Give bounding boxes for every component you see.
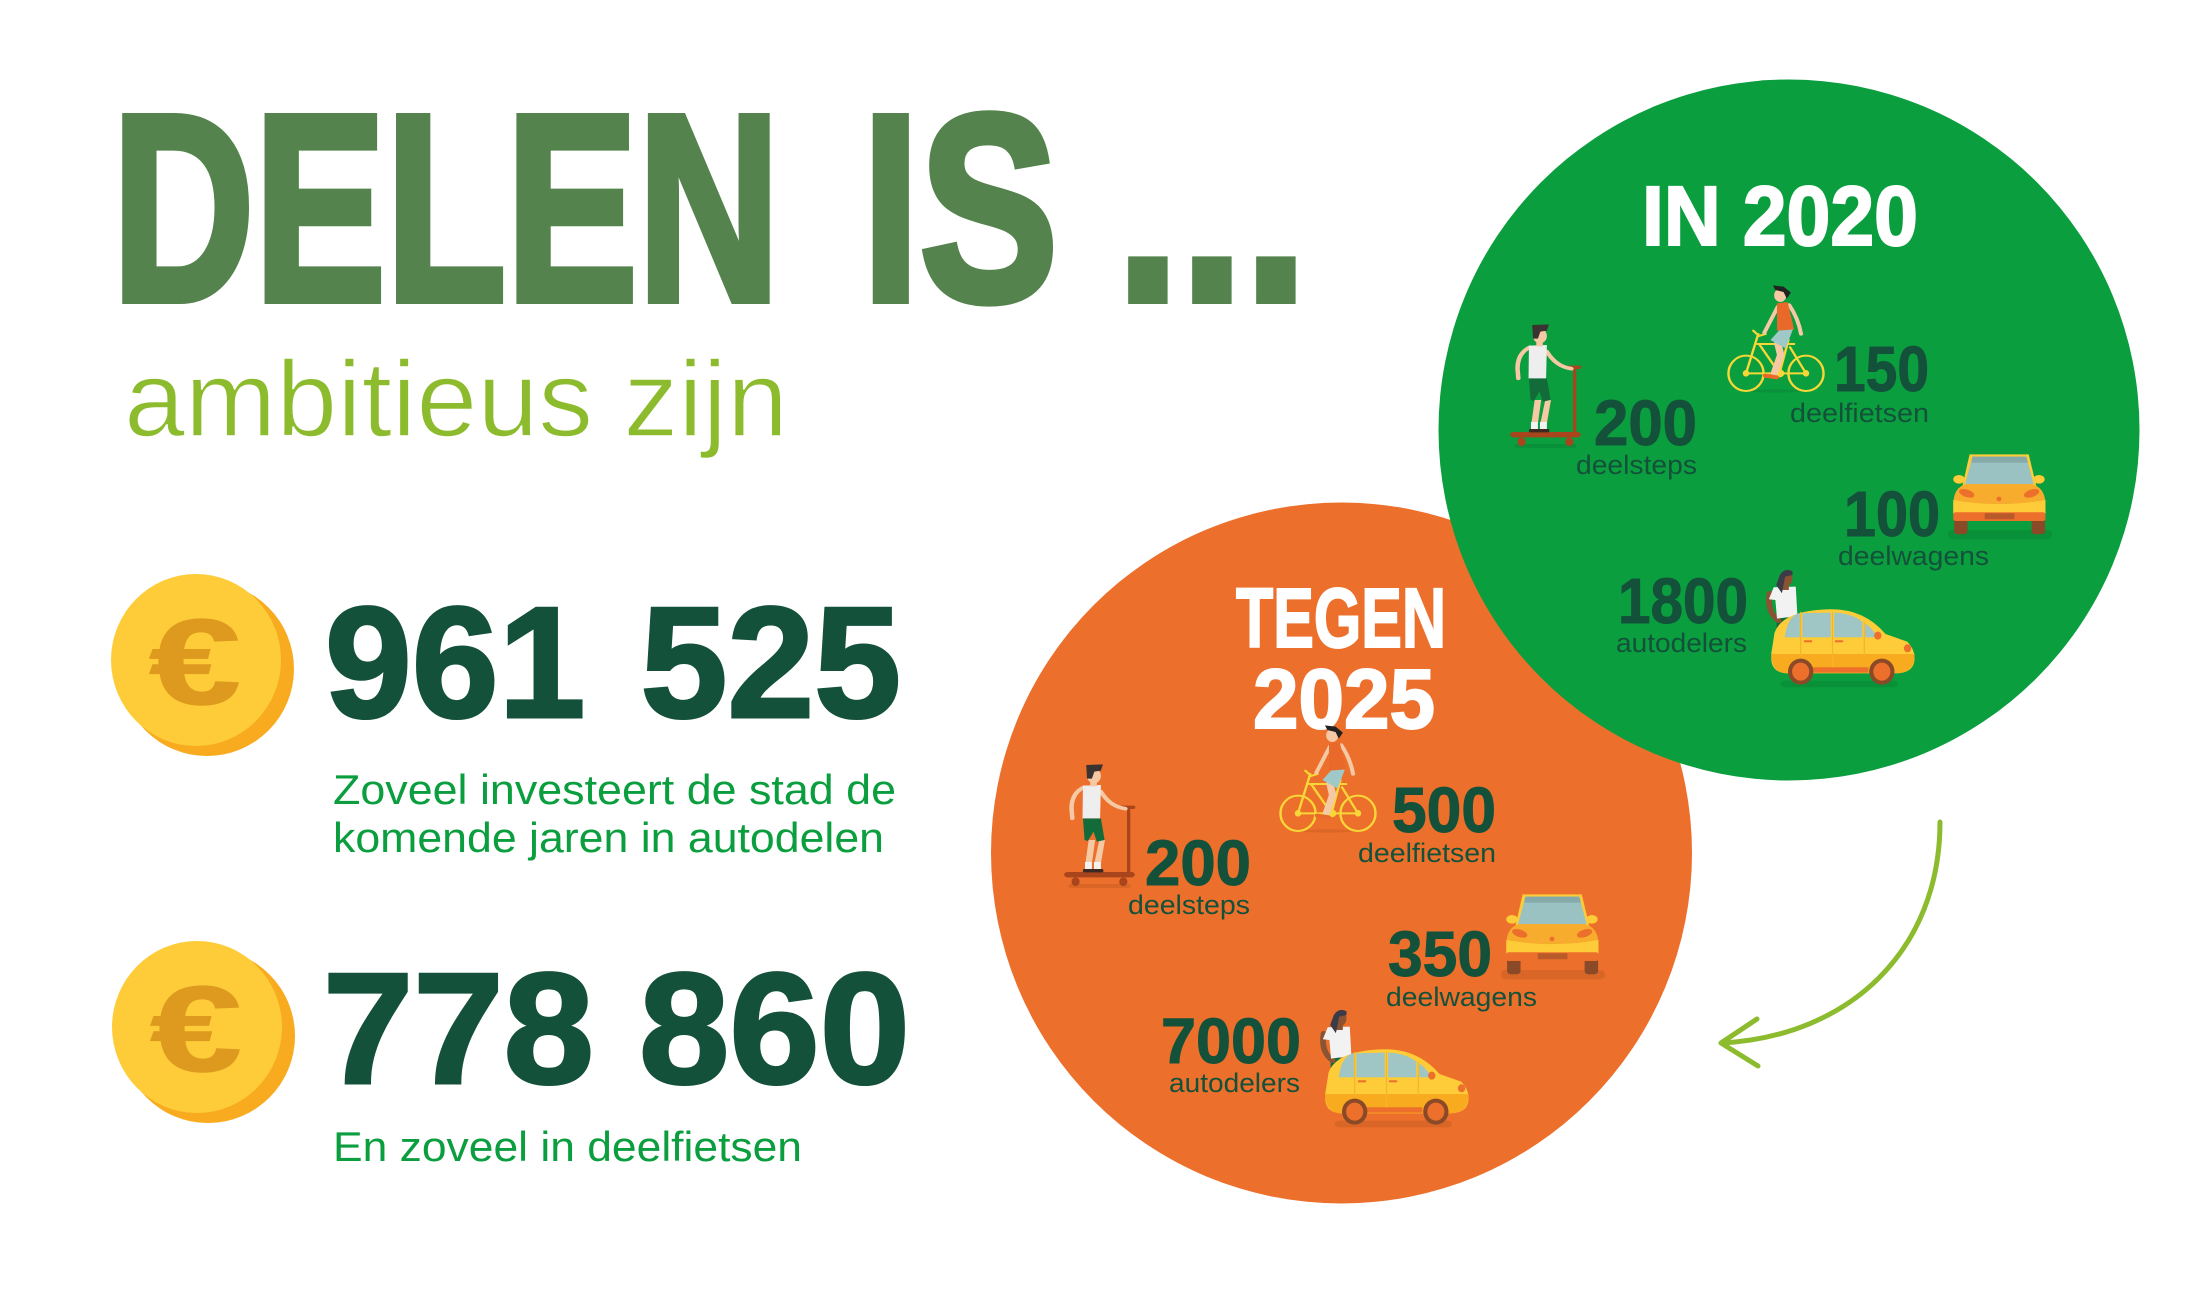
panel: tegen 2025: [991, 502, 1692, 1204]
icon: euro coin: [112, 941, 295, 1123]
stat: deelwagens: 350: [1388, 918, 1492, 990]
icon: euro coin: [111, 574, 294, 756]
title: IS: [862, 60, 1058, 357]
orange circle: [991, 502, 1692, 1204]
stat: deelsteps: 200: [1145, 827, 1251, 899]
stat: deelwagens: deelwagens: [1386, 982, 1537, 1012]
car front: [1948, 454, 2052, 539]
description: Zoveel investeert de stad de: [333, 766, 896, 813]
amount: 778 860: [323, 941, 910, 1117]
scooter rider: [1510, 324, 1581, 448]
stat: autodelers: 7000: [1161, 1005, 1301, 1077]
stat: deelfietsen: 500: [1392, 774, 1496, 846]
car with driver: [1323, 1010, 1469, 1127]
title: DELEN: [112, 60, 780, 357]
stat: autodelers: 1800: [1618, 565, 1748, 637]
heading: 2025: [1253, 652, 1435, 746]
icon: euro coin: €: [149, 594, 241, 730]
car with driver: [1769, 570, 1915, 687]
heading: IN 2020: [1642, 169, 1918, 263]
stat: deelsteps: [1576, 387, 1697, 480]
stat: deelfietsen: deelfietsen: [1358, 838, 1496, 868]
stat: autodelers: autodelers: [1616, 628, 1747, 658]
stat: deelsteps: deelsteps: [1576, 450, 1697, 480]
subtitle: ambitieus zijn: [124, 338, 788, 459]
icon: euro coin: €: [150, 961, 242, 1097]
stat: shared bikes investment: [112, 941, 910, 1170]
stat: deelsteps: 200: [1594, 387, 1697, 459]
arrow: [1721, 822, 1940, 1066]
stat: deelwagens: [1838, 478, 1989, 571]
stat: deelsteps: [1128, 827, 1251, 920]
amount: 961 525: [325, 575, 901, 751]
heading: [1236, 571, 1446, 746]
stat: deelfietsen: [1790, 333, 1929, 428]
green circle: [1438, 80, 2140, 780]
panel: in 2020: [1438, 80, 2140, 780]
title: ...: [1116, 60, 1308, 357]
description: [333, 766, 896, 861]
stat: deelwagens: deelwagens: [1838, 541, 1989, 571]
car front: [1501, 894, 1605, 979]
stat: deelwagens: [1386, 918, 1537, 1012]
stat: autodelers: autodelers: [1169, 1068, 1300, 1098]
stat: deelwagens: 100: [1844, 478, 1940, 550]
stat: car sharing investment: [111, 574, 901, 861]
description: komende jaren in autodelen: [333, 814, 884, 861]
scooter rider: [1064, 764, 1135, 888]
stat: deelfietsen: [1358, 774, 1496, 868]
stat: deelfietsen: 150: [1834, 333, 1929, 405]
illustrations and numbers: tegen 2025: [1064, 725, 1605, 1127]
stat: deelsteps: deelsteps: [1128, 890, 1250, 920]
stat: deelfietsen: deelfietsen: [1790, 398, 1929, 428]
bike rider: [1728, 285, 1824, 393]
bike rider: [1280, 725, 1376, 833]
description: En zoveel in deelfietsen: [333, 1123, 802, 1170]
heading: TEGEN: [1236, 571, 1446, 665]
